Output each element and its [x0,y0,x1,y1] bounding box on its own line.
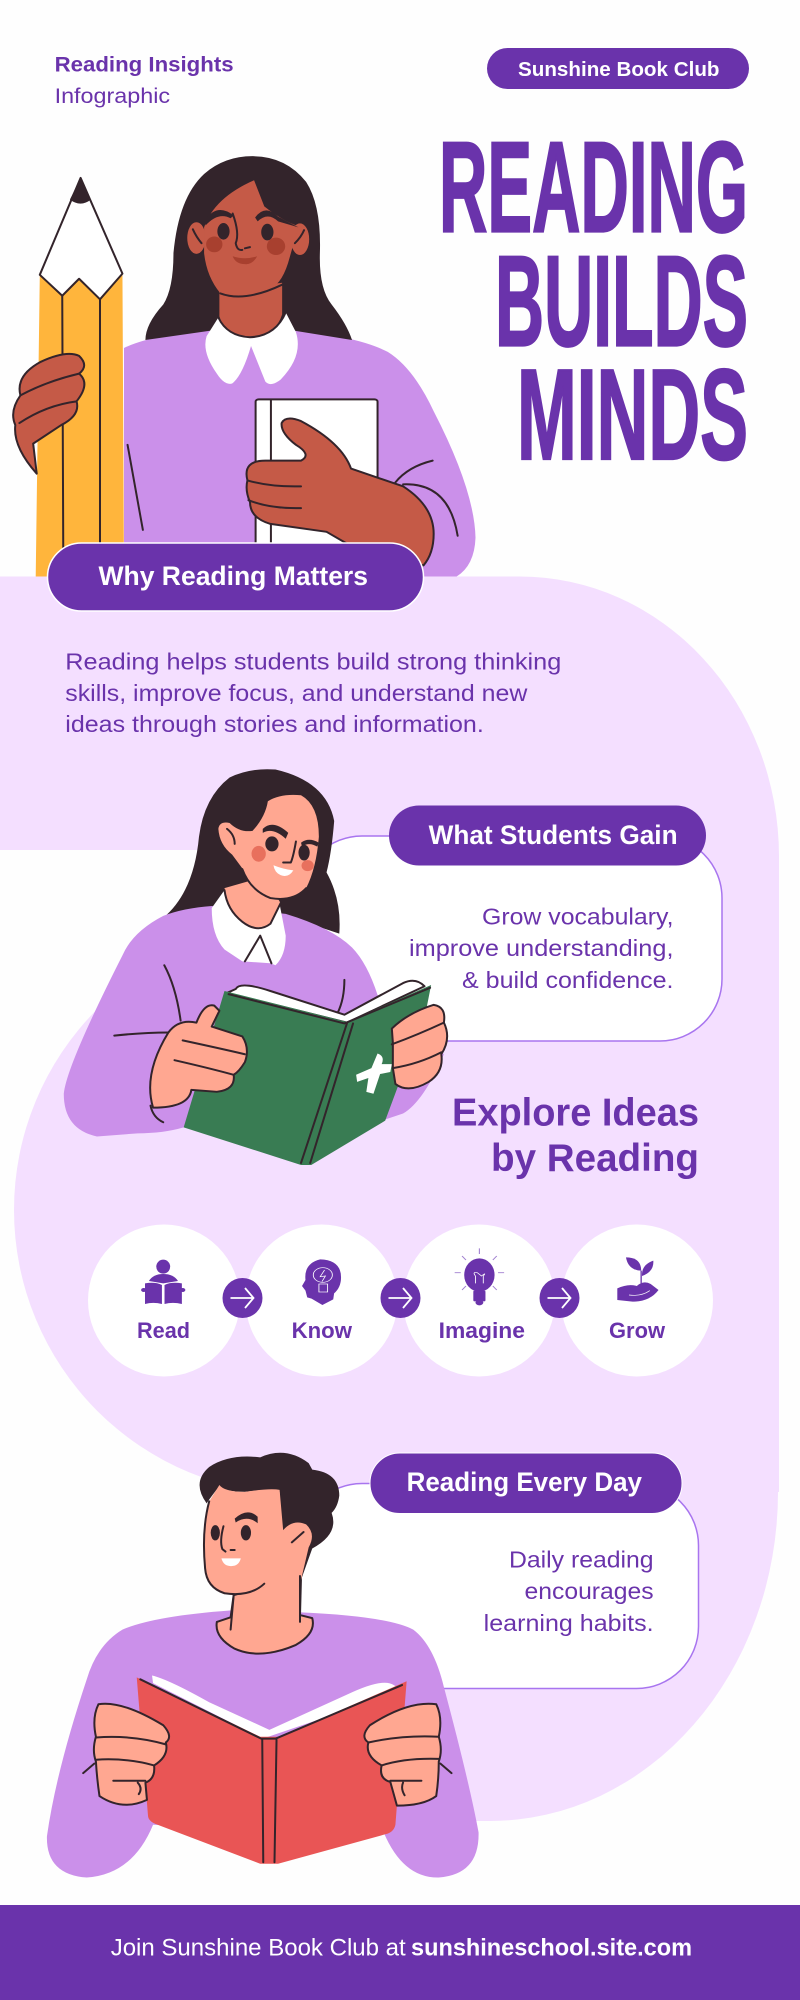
step: Read: Read [137,1318,190,1343]
text block: student gains: Grow vocabulary, [482,904,674,930]
text block: daily reading: encourages [524,1578,654,1604]
text block: why reading matters [65,648,561,737]
heading: Explore Ideas by Reading: Explore Ideas [452,1092,699,1134]
process flow: read, know, imagine, grow [88,1224,713,1376]
step: Imagine [403,1224,555,1376]
pill heading: Why Reading Matters: Why Reading Matters [98,561,368,591]
heading: Explore Ideas by Reading [452,1092,699,1180]
heading: Explore Ideas by Reading: by Reading [491,1137,699,1180]
step: Know: Know [292,1318,353,1343]
panel: what students gain callout [300,806,722,1041]
arrow: imagine to grow [540,1278,580,1318]
text block: student gains: & build confidence. [462,967,674,993]
step: Know [246,1224,398,1376]
illustration: woman holding giant pencil and book [13,156,476,576]
panel: lavender winding background [0,576,779,1821]
pill heading: What Students Gain: What Students Gain [429,820,678,850]
badge: Sunshine Book Club [487,48,749,89]
text block: daily reading: learning habits. [484,1610,654,1636]
text block: why reading matters: ideas through stories and information. [65,711,484,737]
pill heading: What Students Gain [389,806,706,866]
footer banner: sunshineschool.site.com [411,1935,692,1962]
arrow: know to imagine [380,1278,420,1318]
header label: Reading Insights Infographic: Reading Insights [55,54,234,76]
text block: why reading matters: skills, improve focus, and understand new [65,680,528,706]
text block: daily reading: Daily reading [509,1546,654,1572]
title: Reading Builds Minds [439,116,748,487]
step: Imagine: Imagine [439,1318,525,1343]
step: Grow: Grow [609,1318,666,1343]
panel: reading every day callout [300,1453,698,1688]
footer banner: Join Sunshine Book Club at [111,1935,406,1962]
pill heading: Reading Every Day [370,1453,682,1514]
text block: student gains: improve understanding, [409,935,674,961]
text block: daily reading [484,1546,654,1636]
text block: why reading matters: Reading helps students build strong thinking [65,648,561,674]
illustration: man reading red book [47,1453,479,1878]
arrow: read to know [222,1278,262,1318]
header label: Reading Insights Infographic [55,54,234,108]
pill heading: Reading Every Day: Reading Every Day [407,1467,642,1497]
step: Read [88,1224,240,1376]
badge: Sunshine Book Club: Sunshine Book Club [518,58,720,81]
footer banner [0,1905,800,2000]
step: Grow [561,1224,713,1376]
header label: Reading Insights Infographic: Infographic [55,85,170,108]
illustration: woman reading green book [64,769,447,1165]
pill heading: Why Reading Matters [48,543,424,611]
text block: student gains [409,904,674,993]
